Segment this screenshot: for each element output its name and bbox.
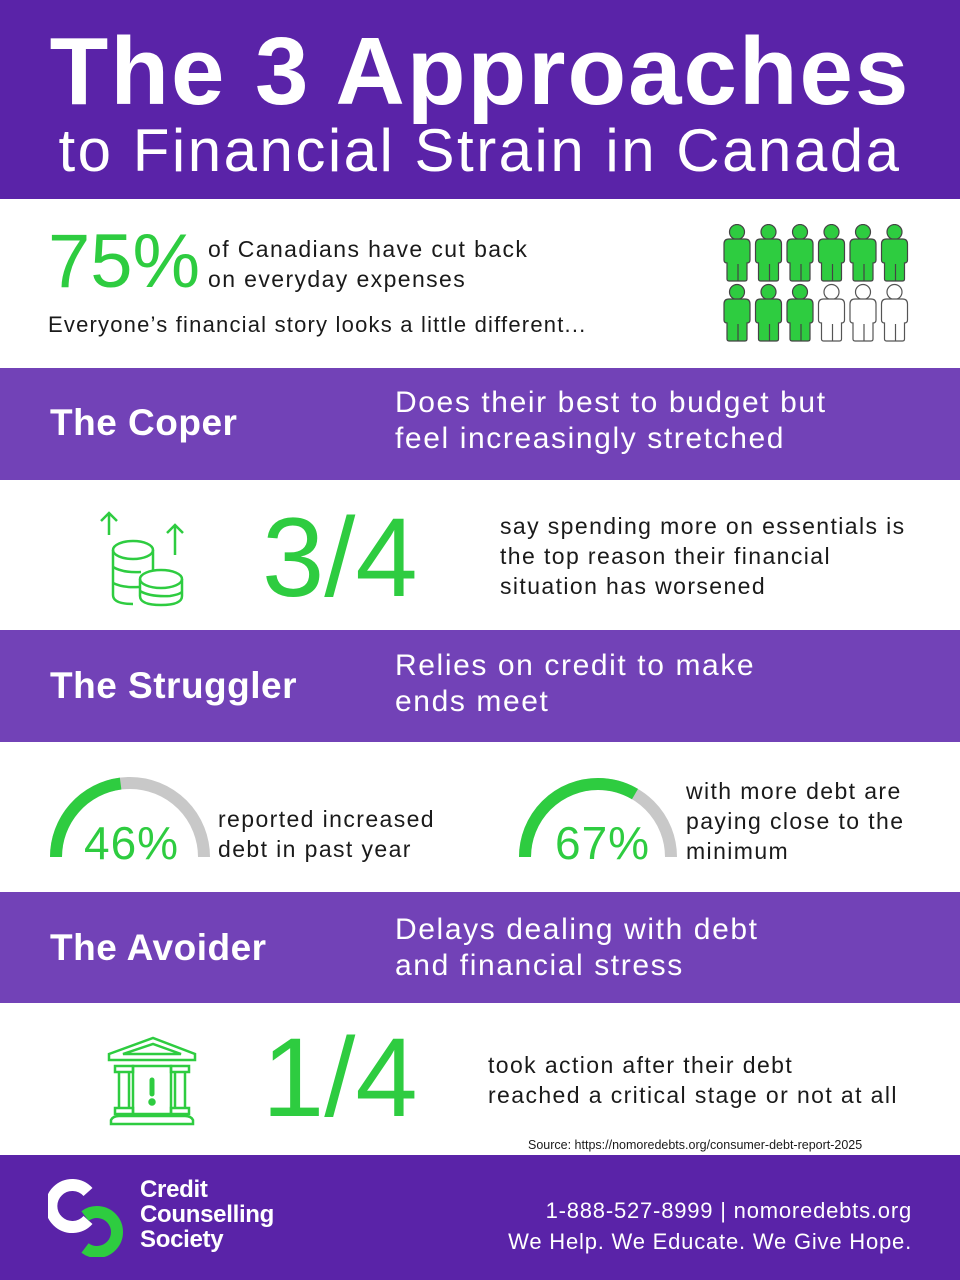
contact: 1-888-527-8999 | nomoredebts.org xyxy=(546,1198,912,1223)
band: The Coper: Does their best to budget but xyxy=(395,386,827,419)
gauge: 67% xyxy=(519,778,904,869)
gauge: 46%: reported increased xyxy=(218,806,435,832)
footer xyxy=(0,1155,960,1280)
header xyxy=(0,0,960,199)
band: The Struggler: Relies on credit to make xyxy=(395,649,755,682)
stat: 75%: of Canadians have cut back xyxy=(208,236,528,262)
band: The Struggler: The Struggler xyxy=(50,665,297,706)
gauge: 46%: debt in past year xyxy=(218,836,412,862)
band: The Avoider: The Avoider xyxy=(50,927,267,968)
source: Source: https://nomoredebts.org/consumer-debt-report-2025 xyxy=(528,1138,862,1152)
gauge: 67%: minimum xyxy=(686,838,789,864)
icon: bank xyxy=(108,1036,196,1126)
text: took action: took action after their debt xyxy=(488,1052,793,1078)
text: essentials: the top reason their financial xyxy=(500,543,831,569)
title: The 3 Approaches xyxy=(50,18,910,125)
logo: Society xyxy=(140,1226,223,1253)
text: essentials: situation has worsened xyxy=(500,573,766,599)
subtitle: to Financial Strain in Canada xyxy=(59,117,901,184)
contact xyxy=(508,1198,912,1254)
gauge: 67%: paying close to the xyxy=(686,808,904,834)
text: essentials xyxy=(500,513,906,599)
stat: 1/4: 1/4 xyxy=(262,1015,418,1140)
text: took action xyxy=(488,1052,898,1108)
gauge: 67%: with more debt are xyxy=(686,778,902,804)
band: The Avoider: and financial stress xyxy=(395,949,684,982)
band: The Coper: feel increasingly stretched xyxy=(395,422,785,455)
logo xyxy=(48,1176,274,1257)
stat: 75%: Everyone’s financial story looks a little different... xyxy=(48,312,586,337)
stat: 75%: 75% xyxy=(48,219,200,304)
band: The Coper: The Coper xyxy=(50,402,237,443)
gauge: 46% xyxy=(50,777,435,869)
icon: people grid xyxy=(723,224,908,342)
text: essentials: say spending more on essentials is xyxy=(500,513,906,539)
band: The Avoider: Delays dealing with debt xyxy=(395,913,759,946)
band: The Avoider xyxy=(0,892,960,1003)
stat: 3/4: 3/4 xyxy=(262,495,418,620)
icon: coins xyxy=(100,511,184,606)
stat: 75%: on everyday expenses xyxy=(208,266,466,292)
band: The Coper xyxy=(0,368,960,480)
gauge: 46%: 46% xyxy=(84,817,179,869)
text: took action: reached a critical stage or not at all xyxy=(488,1082,898,1108)
logo: Counselling xyxy=(140,1201,274,1228)
logo: Credit xyxy=(140,1176,208,1203)
band: The Struggler xyxy=(0,630,960,742)
contact: We Help. We Educate. We Give Hope. xyxy=(508,1229,912,1254)
band: The Struggler: ends meet xyxy=(395,685,549,718)
stat: 75% xyxy=(48,219,586,337)
gauge: 67%: 67% xyxy=(555,817,650,869)
